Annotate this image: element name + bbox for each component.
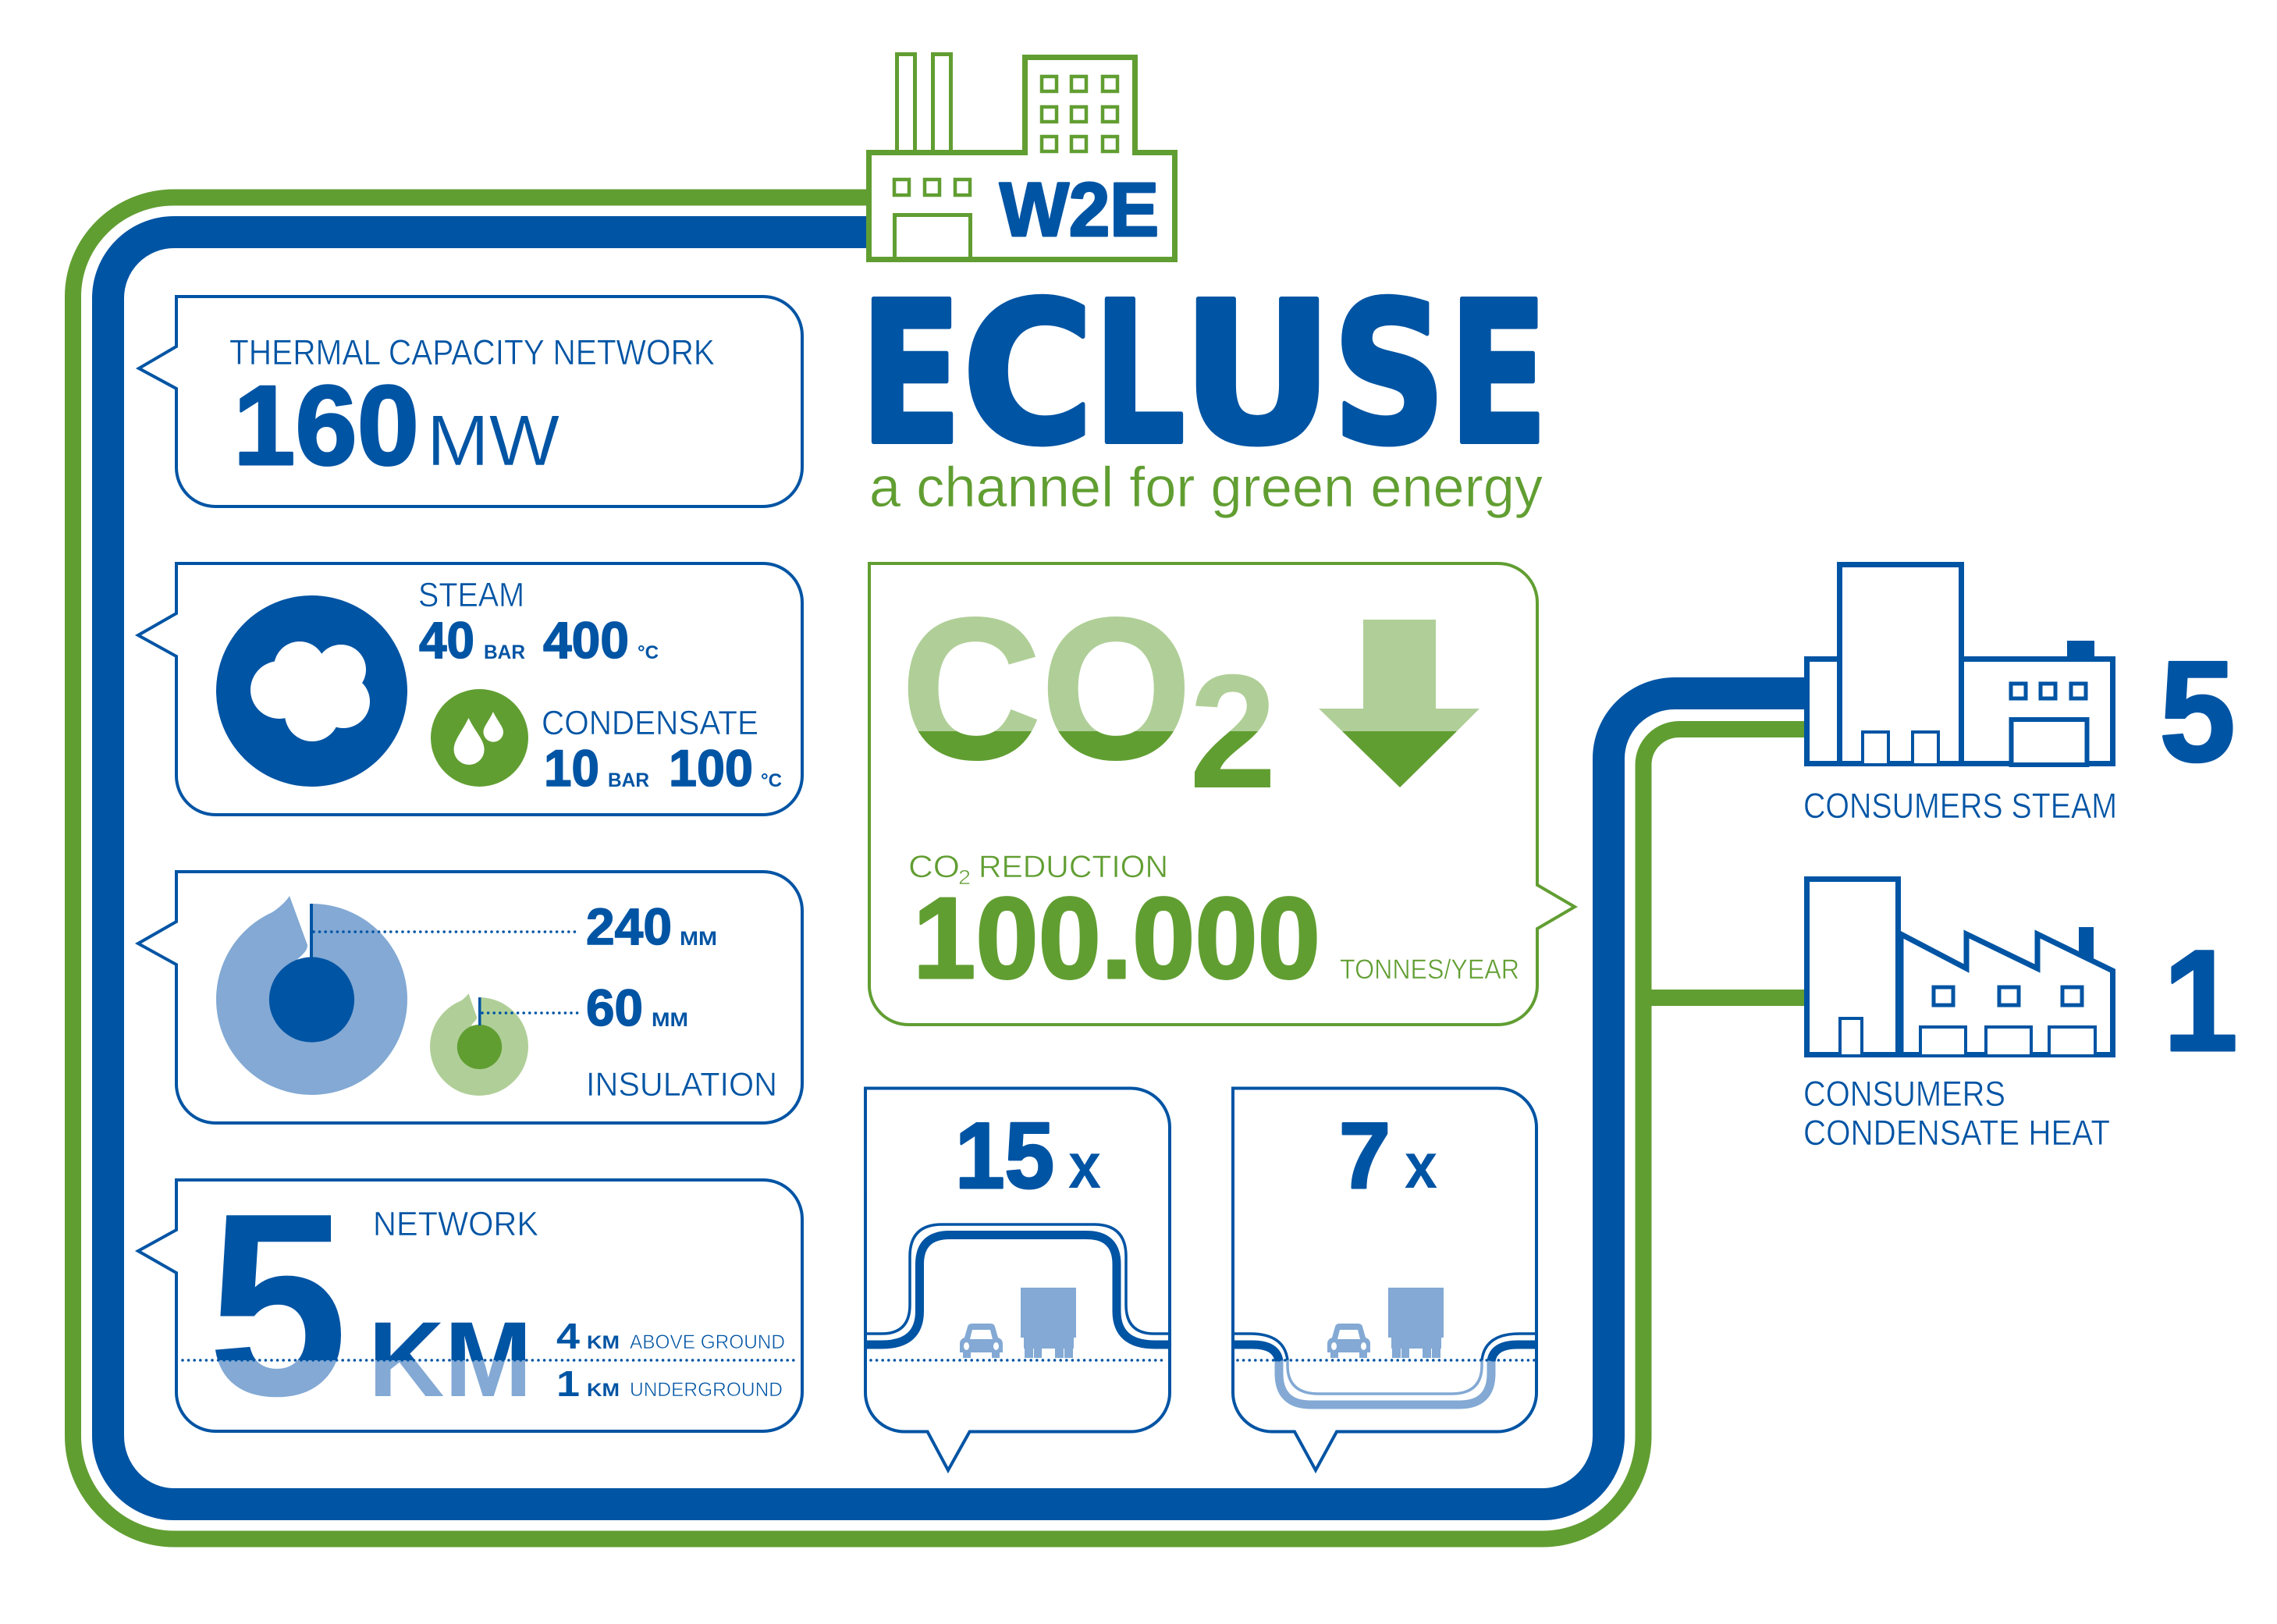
icon: W2E plant: W2E (1000, 167, 1159, 252)
panel: steam and condensate: 40 (419, 611, 474, 669)
label: consumers steam: CONSUMERS STEAM (1803, 786, 2117, 826)
label: consumers condensate heat: CONSUMERS (1803, 1074, 2005, 1114)
icon: car (1327, 1324, 1370, 1358)
panel: thermal capacity: 160 (233, 362, 419, 489)
title: ECLUSE: U (1181, 261, 1334, 489)
panel: steam and condensate: CONDENSATE (542, 704, 758, 742)
panel: network length: 5 (208, 1159, 348, 1450)
number: steam consumers: 5 (2159, 631, 2236, 791)
panel: insulation: INSULATION (586, 1066, 777, 1103)
panel: insulation (138, 872, 802, 1123)
number: condensate consumers: 1 (2163, 921, 2238, 1082)
panel: 15x above ground: x (1068, 1129, 1101, 1202)
CO2 symbol: CO (901, 577, 1192, 801)
panel: 15x above ground (865, 1088, 1170, 1470)
panel: thermal capacity: THERMAL CAPACITY NETWORK (229, 332, 715, 372)
panel: steam and condensate: 100 (669, 739, 753, 797)
panel: CO2 reduction: TONNES/YEAR (1340, 954, 1519, 985)
CO2 symbol: 2 (1189, 641, 1277, 823)
icon: steam cloud (216, 595, 407, 787)
title: ECLUSE: E (1448, 261, 1548, 489)
panel: steam and condensate (138, 563, 802, 815)
title: ECLUSE: E (860, 261, 962, 489)
pipe under road (1234, 1334, 1535, 1405)
title: ECLUSE: L (1093, 261, 1185, 489)
panel: network length: 1 (556, 1363, 580, 1404)
panel: CO2 reduction: 100.000 (913, 874, 1320, 1003)
pipe: green loop (73, 197, 1804, 1539)
title: ECLUSE (860, 261, 1548, 489)
label: consumers condensate heat (1803, 1074, 2110, 1153)
CO2 reduction label: REDUCTION (979, 850, 1168, 884)
icon: steam consumer building (1807, 565, 2113, 765)
panel: steam and condensate: 10 (544, 739, 599, 797)
icon: truck (1021, 1288, 1076, 1358)
panel: steam and condensate: °C (761, 770, 782, 791)
panel: steam and condensate: BAR (608, 769, 649, 791)
pipe: green branch to condensate consumer (1643, 990, 1804, 1006)
panel: 7x underground: x (1405, 1129, 1437, 1202)
title: ECLUSE: S (1332, 261, 1447, 489)
arrow: CO2 down (1319, 620, 1480, 787)
panel: network length (138, 1159, 802, 1450)
panel: network length: KM (587, 1332, 620, 1353)
icon: condensate consumer building (1807, 879, 2113, 1056)
panel: network length: 4 (556, 1316, 580, 1356)
pipe above road (865, 1224, 1170, 1345)
panel: insulation: 60 (586, 979, 643, 1036)
panel: network length: KM (587, 1380, 620, 1401)
panel: thermal capacity: MW (427, 401, 559, 481)
icon: small pipe section (430, 991, 528, 1096)
panel: network length: KM (368, 1300, 532, 1420)
pipe: blue loop (108, 233, 1804, 1505)
label: consumers condensate heat: CONDENSATE HEAT (1803, 1113, 2110, 1153)
CO2 reduction label (908, 850, 1168, 889)
panel: insulation: MM (680, 928, 717, 950)
CO2 reduction label: 2 (958, 865, 971, 889)
icon: car (960, 1324, 1003, 1358)
panel: insulation: MM (652, 1009, 688, 1031)
panel: network length: NETWORK (373, 1205, 538, 1243)
icon: condensate drops (431, 689, 528, 787)
panel: network length: ABOVE GROUND (630, 1331, 785, 1353)
panel: 7x underground (1233, 1088, 1536, 1470)
panel: insulation: 240 (586, 897, 672, 955)
panel: steam and condensate: °C (638, 642, 659, 663)
panel: 15x above ground: 15 (955, 1103, 1054, 1208)
panel: CO2 reduction (869, 563, 1575, 1025)
title: ECLUSE: C (961, 261, 1094, 489)
panel: steam and condensate: 400 (543, 611, 629, 669)
CO2 reduction label: CO (908, 850, 960, 884)
subtitle: a channel for green energy (869, 457, 1543, 519)
panel: steam and condensate: STEAM (418, 576, 524, 614)
panel: steam and condensate: BAR (484, 641, 525, 663)
panel: thermal capacity (139, 297, 802, 506)
icon: truck (1388, 1288, 1444, 1358)
icon: W2E plant (869, 55, 1175, 261)
icon: large pipe section (216, 896, 407, 1095)
panel: 7x underground: 7 (1339, 1103, 1391, 1208)
panel: network length: UNDERGROUND (630, 1379, 783, 1401)
